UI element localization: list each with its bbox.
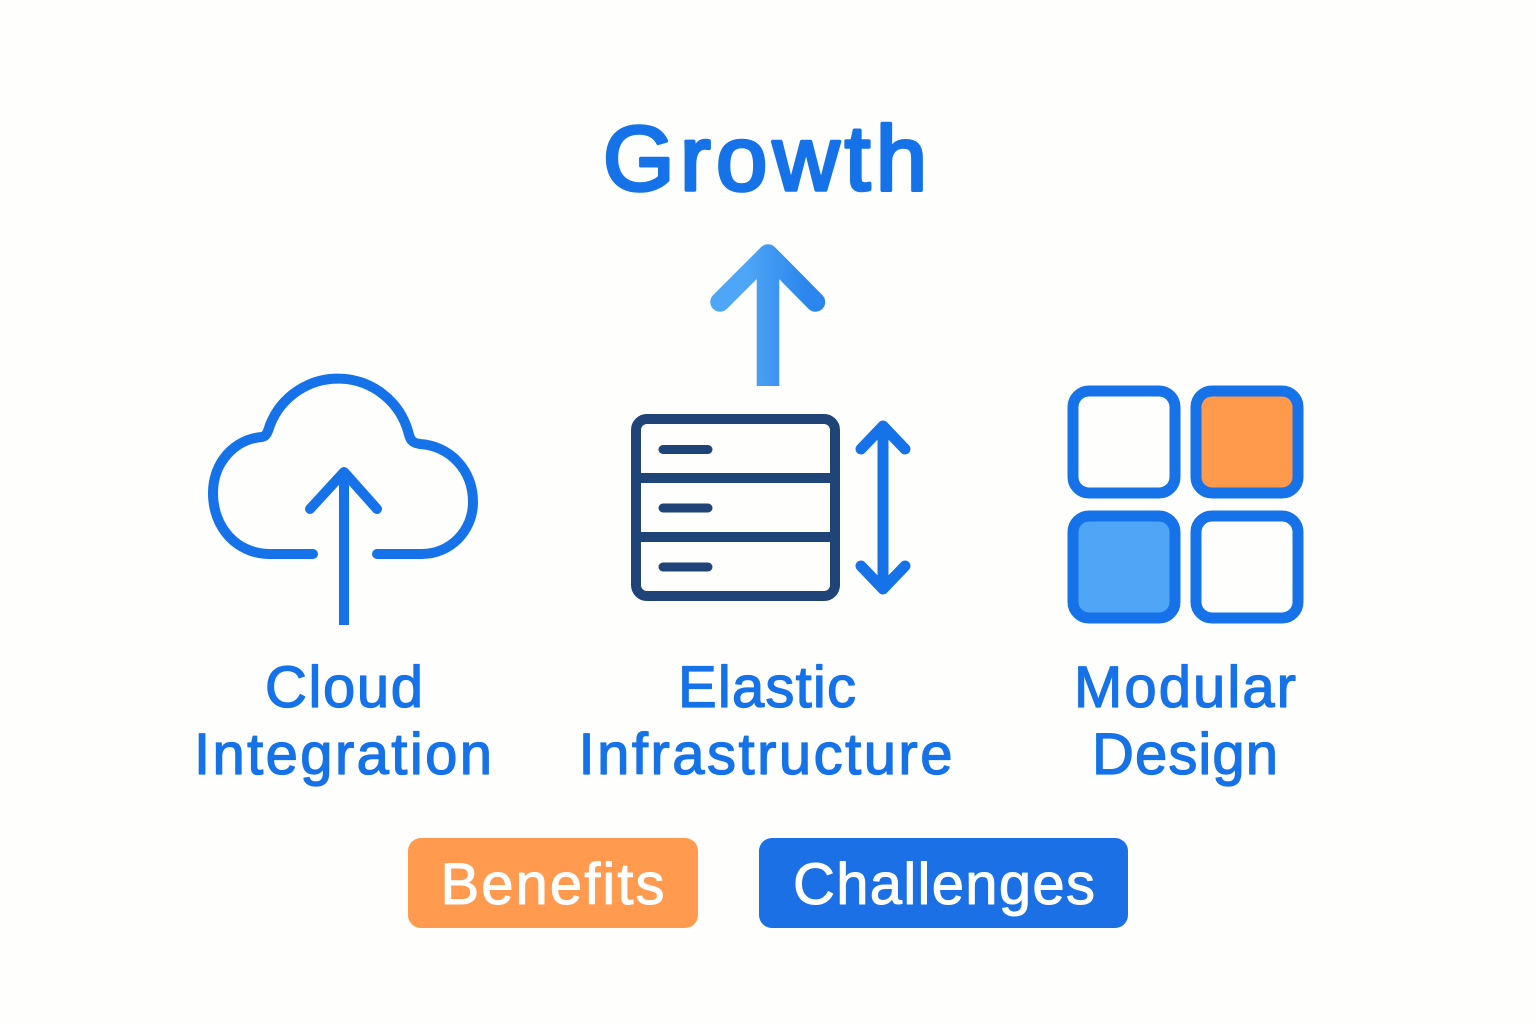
- icon: modular grid: [1073, 391, 1298, 618]
- icon: growth arrow: [720, 254, 816, 386]
- label: cloud integration: [194, 655, 492, 787]
- label: cloud integration: Cloud: [265, 655, 423, 720]
- label: modular design: Modular: [1074, 655, 1296, 720]
- icon: cloud upload: [213, 379, 473, 625]
- icon: vertical double arrow: [861, 426, 905, 589]
- label: modular design: [1074, 655, 1296, 787]
- badge: benefits: Benefits: [440, 852, 664, 917]
- title: Growth: [603, 108, 927, 210]
- badge: challenges: Challenges: [793, 852, 1095, 917]
- badge: benefits: [408, 838, 698, 928]
- label: cloud integration: Integration: [194, 722, 492, 787]
- icon: server stack: [636, 419, 835, 596]
- label: elastic infrastructure: Infrastructure: [578, 722, 952, 787]
- label: modular design: Design: [1092, 722, 1278, 787]
- label: elastic infrastructure: [578, 655, 952, 787]
- label: elastic infrastructure: Elastic: [678, 655, 856, 720]
- badge: challenges: [759, 838, 1128, 928]
